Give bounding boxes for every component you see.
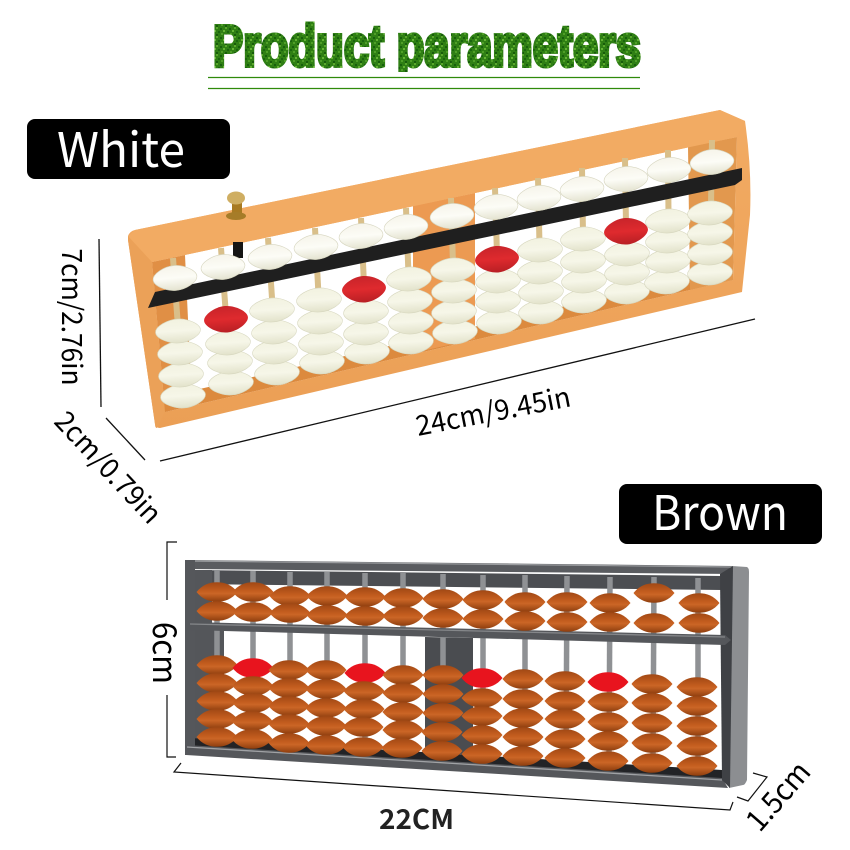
beads above bar xyxy=(152,148,735,292)
dimension: 2cm depth: 2cm/0.79in xyxy=(46,401,172,532)
abacus frame xyxy=(128,110,750,428)
upper beads xyxy=(196,582,720,633)
black bar xyxy=(148,168,742,308)
rods xyxy=(173,140,712,396)
dimension: 6cm height xyxy=(143,542,191,757)
label: White xyxy=(27,111,230,181)
title underline xyxy=(208,78,640,88)
brown abacus xyxy=(185,560,749,788)
dimension: 22CM width xyxy=(174,763,733,837)
dimension: 7cm height: 7cm/2.76in xyxy=(53,248,93,386)
dimension: 22CM width: 22CM xyxy=(379,798,454,837)
lower beads xyxy=(196,655,718,776)
white abacus xyxy=(128,110,750,428)
rods xyxy=(217,570,698,765)
dimension: 24cm width xyxy=(160,319,755,461)
label: White: White xyxy=(57,111,185,181)
dimension: 6cm height: 6cm xyxy=(143,622,191,684)
beads below bar xyxy=(155,199,733,410)
label: Brown: Brown xyxy=(652,474,788,544)
pin xyxy=(226,192,246,258)
dimension: 1.5cm depth: 1.5cm xyxy=(733,750,819,839)
frame rails xyxy=(185,560,749,788)
abacus frame back xyxy=(186,560,733,788)
title: Product parameters xyxy=(213,14,641,79)
dimension: 24cm width: 24cm/9.45in xyxy=(412,376,574,445)
